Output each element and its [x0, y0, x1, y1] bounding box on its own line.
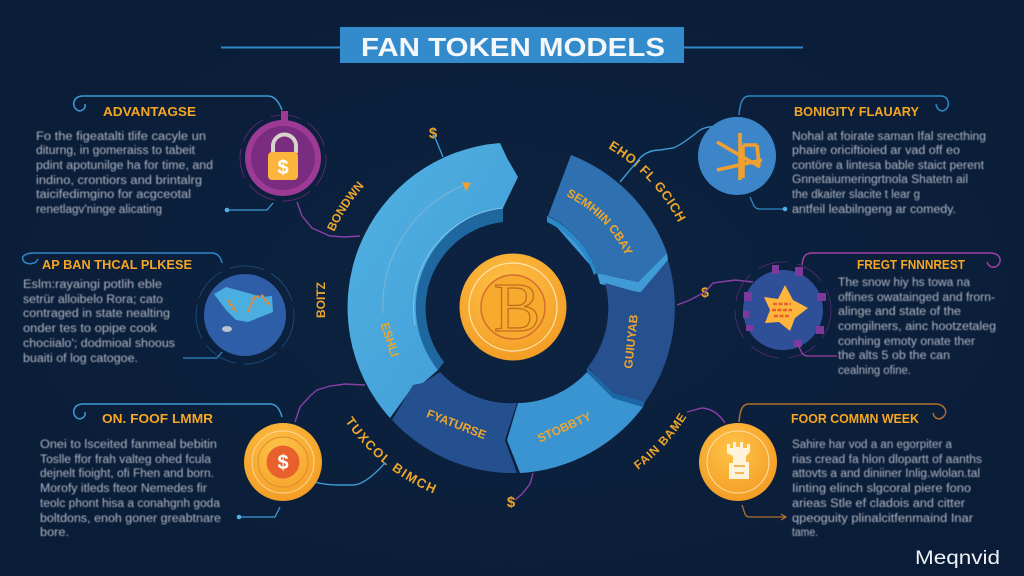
heading: BONIGITY FLAUARY [794, 104, 919, 119]
body text: the dkaiter slacite t lear g [792, 189, 920, 201]
segment: large light blue arc [348, 143, 518, 418]
panel: on foof lmmr [40, 404, 322, 539]
body text [36, 131, 213, 216]
segment labels: FYATURSE [425, 406, 488, 442]
body text [792, 439, 982, 539]
body text: Gnnetaiumeringrtnola Shatetn ail [792, 174, 968, 186]
segment: bottom light [507, 367, 645, 473]
outer curved labels: EHOI FL GCICH [608, 140, 686, 222]
heading: ON. FOOF LMMR [102, 411, 214, 426]
body text: comgilners, ainc hootzetaleg [838, 321, 996, 333]
connector dot [227, 203, 273, 210]
body text: Eslm:rayaingi potlih eble [23, 279, 162, 291]
body text: contöre a lintesa bable staict perent [792, 160, 985, 172]
segment: bottom dark [392, 372, 517, 473]
connector arrow [742, 505, 786, 520]
body text: phaire oriciftioied ar vad off eo [792, 145, 960, 157]
segment labels: GUIUYAB [621, 314, 641, 369]
body text: Toslle ffor frah valteg ohed fcula [40, 454, 212, 466]
body text: The snow hiy hs towa na [838, 277, 971, 289]
body text [838, 277, 996, 377]
body text: setrür alloibelo Rora; cato [23, 294, 163, 306]
panel: bonigity flauary [698, 96, 986, 216]
segment labels: STOBBTY [535, 409, 593, 445]
body text [40, 439, 221, 539]
icon: dollar coin [244, 423, 322, 501]
body text: the alts 5 ob the can [838, 350, 950, 362]
body text: chociialo'; dodmioal shoous [23, 338, 175, 350]
segment: right dark [588, 260, 675, 402]
body text: bore. [40, 527, 69, 539]
icon: map globe [196, 266, 294, 364]
outer curved labels: BONDWN [327, 181, 364, 232]
heading bracket [23, 253, 222, 264]
icon: star badge [735, 262, 831, 358]
central ring chart [348, 143, 675, 473]
body text: arieas Stle ef cladois and citter [792, 498, 965, 510]
body text: attovts a and diniiner Inlig.wlolan.tal [792, 468, 980, 480]
icon: padlock on purple badge: $ [277, 157, 289, 179]
body text: contraged in state nealting [23, 308, 170, 320]
body text: renetlagv'ninge alicating [36, 204, 162, 216]
title banner [221, 27, 803, 63]
segment: top right [547, 155, 668, 293]
connector [797, 343, 837, 356]
heading: FREGT FNNNREST [857, 257, 965, 272]
panel: advantage [36, 96, 326, 216]
panel: ap ban thcal plkese [23, 253, 294, 365]
segment labels: SEMHIIN CBAY [567, 190, 633, 254]
heading bracket [74, 96, 282, 111]
body text: onder tes to opipe cook [23, 323, 157, 335]
body text: qpeoguity plinalcitfenmaind Inar [792, 513, 973, 525]
outer curved labels: $ [701, 284, 709, 300]
body text: diturng, in gomeraiss to tabeit [36, 145, 196, 157]
segment labels [378, 190, 641, 445]
title banner: FAN TOKEN MODELS [361, 32, 665, 62]
body text: rias cread fa hlon dlopartt of aanths [792, 454, 982, 466]
heading bracket [802, 253, 1000, 267]
heading: AP BAN THCAL PLKESE [42, 257, 192, 272]
body text: conhing emoty onate ther [838, 336, 975, 348]
outer curved labels: $ [507, 494, 516, 511]
body text: Sahire har vod a an egorpiter a [792, 439, 953, 451]
body text: dejnelt fioight, ofi Fhen and born. [40, 468, 214, 480]
body text [792, 131, 986, 216]
connector lines [295, 127, 753, 500]
heading: ADVANTAGSE [103, 104, 196, 119]
body text: Onei to lsceited fanmeal bebitin [40, 439, 217, 451]
outer curved labels: TUXCOL BIMCH [346, 416, 436, 494]
body text [23, 279, 175, 365]
central coin [460, 254, 566, 360]
heading: FOOR COMMN WEEK [791, 411, 920, 426]
icon: padlock on purple badge [240, 111, 326, 201]
connector [183, 352, 222, 358]
icon: arc arrowhead [462, 182, 471, 191]
outer curved labels: FAIN BAME [634, 412, 686, 470]
connector dot [239, 507, 280, 517]
body text: Morofy itleds fteor Nemedes fir [40, 483, 207, 495]
panel: foor comm week [699, 404, 982, 539]
body text: offines owatainged and frorn- [838, 292, 995, 304]
heading bracket [739, 404, 946, 422]
body text: buaiti of log catogoe. [23, 353, 138, 365]
connector dot [750, 197, 785, 209]
body text: boltdons, enoh goner greabtnare [40, 513, 221, 525]
body text: Nohal at foirate saman Ifal srecthing [792, 131, 986, 143]
outer curved labels: $ [429, 125, 438, 142]
heading bracket [74, 404, 282, 419]
body text: antfeil leabilngeng ar comedy. [792, 204, 956, 216]
outer curved labels [314, 125, 709, 511]
body text: teolc phont hisa a conahgnh goda [40, 498, 221, 510]
central coin: B [494, 270, 540, 347]
panel: fregt fnnnrest [735, 253, 1000, 377]
logo: Meqnvid [915, 548, 1000, 569]
body text: Iinting elinch slgcoral piere fono [792, 483, 971, 495]
body text: pdint apotunilge ha for time, and [36, 160, 213, 172]
body text: Fo the figeatalti tlife cacyle un [36, 131, 206, 143]
body text: indino, crontiors and brintalrg [36, 175, 202, 187]
body text: taicifedimgino for acgceotal [36, 189, 191, 201]
body text: alinge and state of the [838, 306, 961, 318]
outer curved labels: BOITZ [314, 282, 328, 318]
segment labels: ESHLI [378, 321, 402, 359]
body text: cealning ofine. [838, 365, 911, 377]
icon: dollar coin: $ [277, 452, 289, 474]
icon: castle coin [699, 423, 777, 501]
icon: gold lattice badge [698, 117, 776, 195]
body text: tame. [792, 527, 818, 539]
heading bracket [739, 96, 948, 115]
